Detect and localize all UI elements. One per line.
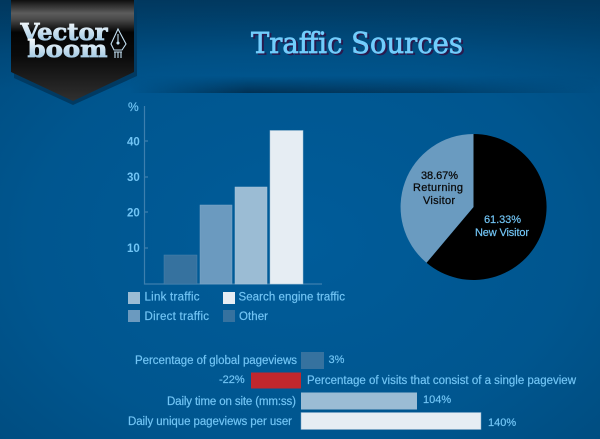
axes (144, 106, 322, 284)
label: returning visitor (413, 170, 463, 207)
y axis labels: 20 (127, 208, 140, 220)
logo banner (11, 0, 137, 105)
legend: link traffic: Link traffic (144, 292, 200, 304)
metric: daily time on site: Daily time on site (mm:ss) (167, 396, 296, 408)
y axis unit label: % (128, 100, 139, 114)
logo wordmark (19, 19, 108, 63)
metric: daily time on site: 104% (423, 394, 451, 406)
metric: daily time on site (167, 392, 451, 410)
metric: daily unique pageviews per user: Daily unique pageviews per user (128, 416, 292, 428)
logo wordmark: boom (28, 36, 108, 63)
bar: search engine traffic (270, 130, 303, 284)
logo wordmark: Vector (19, 19, 108, 46)
title: Traffic Sources (253, 28, 465, 62)
metric: single pageview visits (219, 372, 577, 388)
metric: single pageview visits: -22% (219, 374, 245, 386)
label: new visitor (475, 214, 529, 239)
metric: global pageviews: 3% (328, 354, 345, 366)
title: Traffic Sources (251, 26, 463, 60)
y axis labels: 40 (127, 136, 140, 148)
label: new visitor: New Visitor (475, 227, 529, 239)
legend: search engine traffic: Search engine traffic (238, 292, 345, 304)
slice: returning visitor (401, 134, 474, 263)
bar: link traffic (235, 187, 267, 284)
metric: daily unique pageviews per user: 140% (488, 417, 516, 429)
label: new visitor: 61.33% (484, 214, 521, 226)
bar list: site metrics (128, 352, 577, 430)
metric: global pageviews (135, 352, 345, 369)
icon: pen nib (111, 29, 126, 58)
y axis labels: 10 (127, 243, 140, 255)
metric: single pageview visits: Percentage of visits that consist of a single pageview (307, 375, 577, 387)
label: returning visitor: 38.67% (421, 170, 458, 182)
y axis labels: 30 (127, 172, 140, 184)
label: returning visitor: Visitor (423, 195, 455, 207)
slice: new visitor (426, 134, 547, 280)
pie chart: visitors (401, 134, 547, 280)
legend: direct traffic: Direct traffic (144, 311, 209, 323)
bar chart: traffic sources (127, 100, 322, 284)
bar: other (164, 255, 197, 284)
metric: daily unique pageviews per user (128, 412, 516, 430)
label: returning visitor: Returning (413, 182, 463, 194)
legend (128, 292, 345, 323)
legend: other (223, 310, 268, 323)
legend: other: Other (239, 311, 268, 323)
metric: global pageviews: Percentage of global pageviews (135, 355, 297, 367)
y axis labels (127, 136, 140, 255)
bar: direct traffic (200, 205, 232, 284)
